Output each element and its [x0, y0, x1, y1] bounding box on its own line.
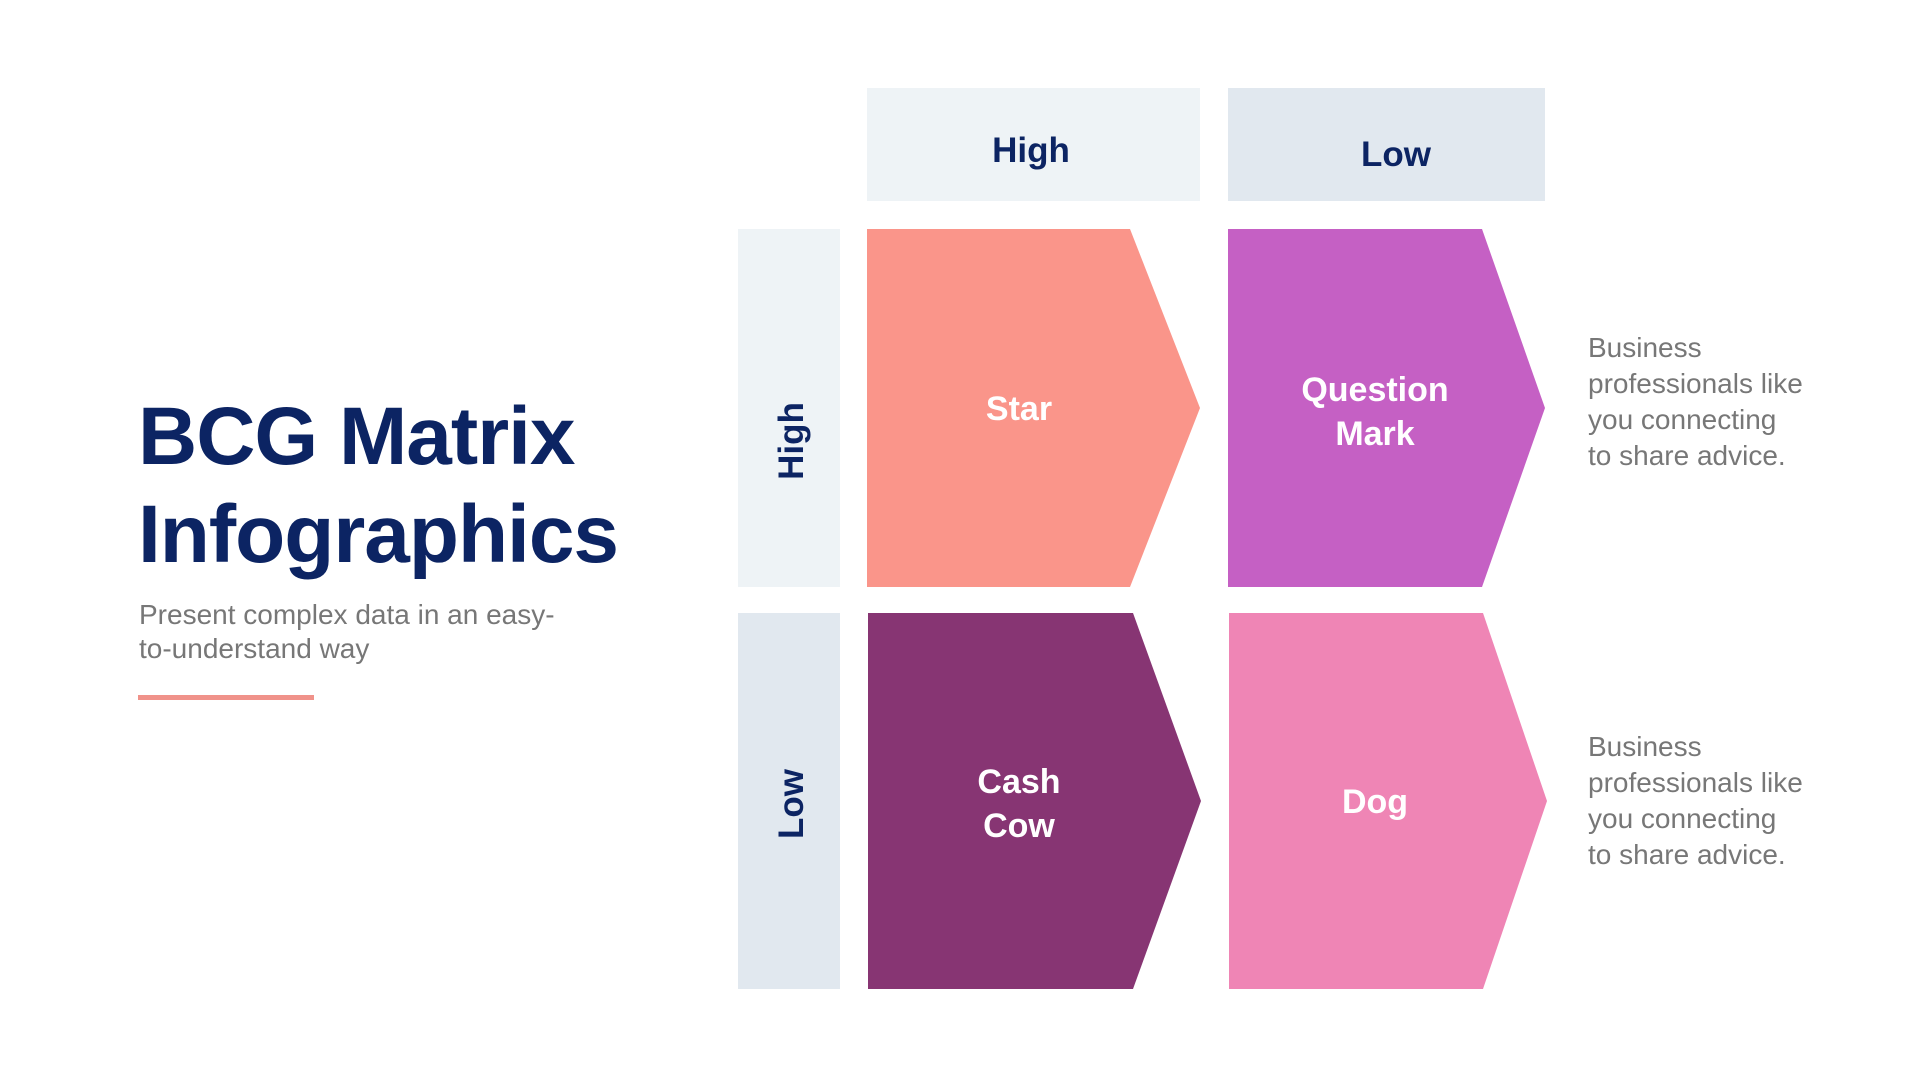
description: top: to share advice. — [1588, 440, 1786, 471]
row header: High: High — [772, 402, 811, 480]
column header: Low: Low — [1361, 135, 1432, 174]
description: top — [1588, 332, 1803, 471]
quadrant: Cash Cow: Cow — [983, 807, 1055, 845]
description: bottom: Business — [1588, 731, 1702, 762]
column header: High: High — [992, 131, 1070, 170]
description: top: professionals like — [1588, 368, 1803, 399]
quadrant: Cash Cow: Cash — [977, 763, 1061, 801]
quadrant: Dog: Dog — [1342, 783, 1408, 821]
subtitle: to-understand way — [139, 633, 369, 664]
description: bottom: to share advice. — [1588, 839, 1786, 870]
quadrant: Question Mark — [1228, 229, 1545, 587]
description: top: you connecting — [1588, 404, 1776, 435]
row header: Low: Low — [772, 768, 811, 839]
description: bottom — [1588, 731, 1803, 870]
accent line — [138, 695, 314, 700]
subtitle: Present complex data in an easy- — [139, 599, 555, 630]
quadrant: Question Mark: Question — [1301, 371, 1449, 409]
description: top: Business — [1588, 332, 1702, 363]
quadrant: Cash Cow — [868, 613, 1201, 989]
column header: Low — [1228, 88, 1545, 201]
column header: High — [867, 88, 1200, 201]
title — [138, 391, 618, 580]
row header: Low — [738, 613, 840, 989]
subtitle — [139, 599, 555, 664]
title: Infographics — [138, 489, 618, 580]
description: bottom: professionals like — [1588, 767, 1803, 798]
description: bottom: you connecting — [1588, 803, 1776, 834]
quadrant: Dog — [1229, 613, 1547, 989]
quadrant: Question Mark: Mark — [1335, 415, 1415, 453]
quadrant: Star — [867, 229, 1200, 587]
quadrant: Star: Star — [986, 390, 1052, 428]
row header: High — [738, 229, 840, 587]
title: BCG Matrix — [138, 391, 575, 482]
